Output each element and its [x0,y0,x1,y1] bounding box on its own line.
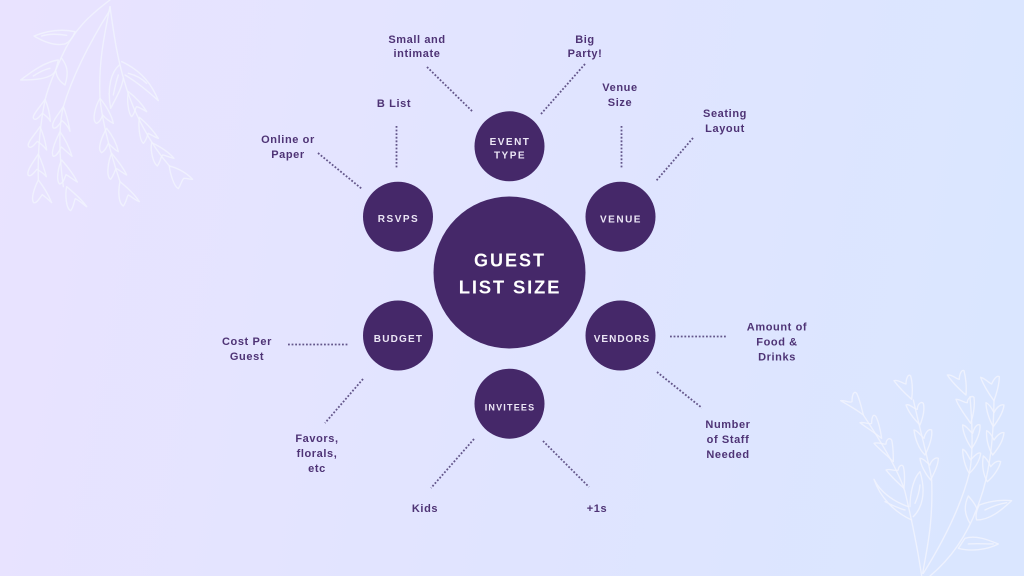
connector: seating layout [656,138,693,181]
node: venue [586,182,656,252]
label: number of staff needed: of Staff [707,434,749,446]
connector: small and intimate [427,67,473,112]
node: event type: EVENT [490,137,530,148]
label: online or paper: Online or [261,134,315,146]
node: event type [474,111,544,181]
label: seating layout: Layout [705,123,745,135]
label: small and intimate: intimate [394,48,440,60]
connector: venue size [620,126,622,168]
hub: guest list size: GUEST [474,250,546,270]
label: amount of food and drinks: Drinks [758,352,796,364]
node: rsvps [363,182,433,252]
label: venue size: Size [608,97,632,109]
node: invitees: INVITEES [485,402,535,412]
node: budget: BUDGET [374,334,423,345]
connector: kids [431,439,474,488]
node: venue: VENUE [600,214,642,226]
label: favors florals etc: florals, [297,448,337,460]
label: amount of food and drinks: Amount of [747,322,807,334]
label: online or paper: Paper [271,149,305,161]
decoration: hanging branch top left [21,0,193,211]
label: number of staff needed: Number [705,419,751,431]
node: vendors [586,300,656,370]
connector: online or paper [318,153,362,189]
label: big party: Party! [568,48,602,60]
hub: guest list size [434,196,586,348]
connector: big party [541,64,585,114]
label: kids: Kids [412,503,438,515]
label: small and intimate: Small and [388,34,446,46]
label: big party: Big [575,34,595,46]
label: cost per guest: Guest [230,351,264,363]
label: plus ones: +1s [587,503,607,515]
node: vendors: VENDORS [594,334,650,345]
label: favors florals etc: Favors, [295,433,339,445]
connector: b list [396,126,398,169]
connector: amount of food [670,336,727,338]
decoration: branch bottom right [841,370,1012,576]
node: budget [363,300,433,370]
node: invitees [474,369,544,439]
label: amount of food and drinks: Food & [756,336,798,348]
connector: plus ones [543,441,589,487]
label: number of staff needed: Needed [706,449,750,461]
hub: guest list size: LIST SIZE [459,276,561,298]
node: event type: TYPE [494,150,526,162]
label: b list: B List [377,98,411,110]
label: favors florals etc: etc [308,463,326,475]
label: seating layout: Seating [703,108,747,120]
label: venue size: Venue [602,82,638,94]
connector: cost per guest [288,344,349,346]
connector: favors [325,379,363,423]
node: rsvps: RSVPS [378,214,419,225]
connector: number of staff [657,372,702,408]
label: cost per guest: Cost Per [222,336,272,348]
